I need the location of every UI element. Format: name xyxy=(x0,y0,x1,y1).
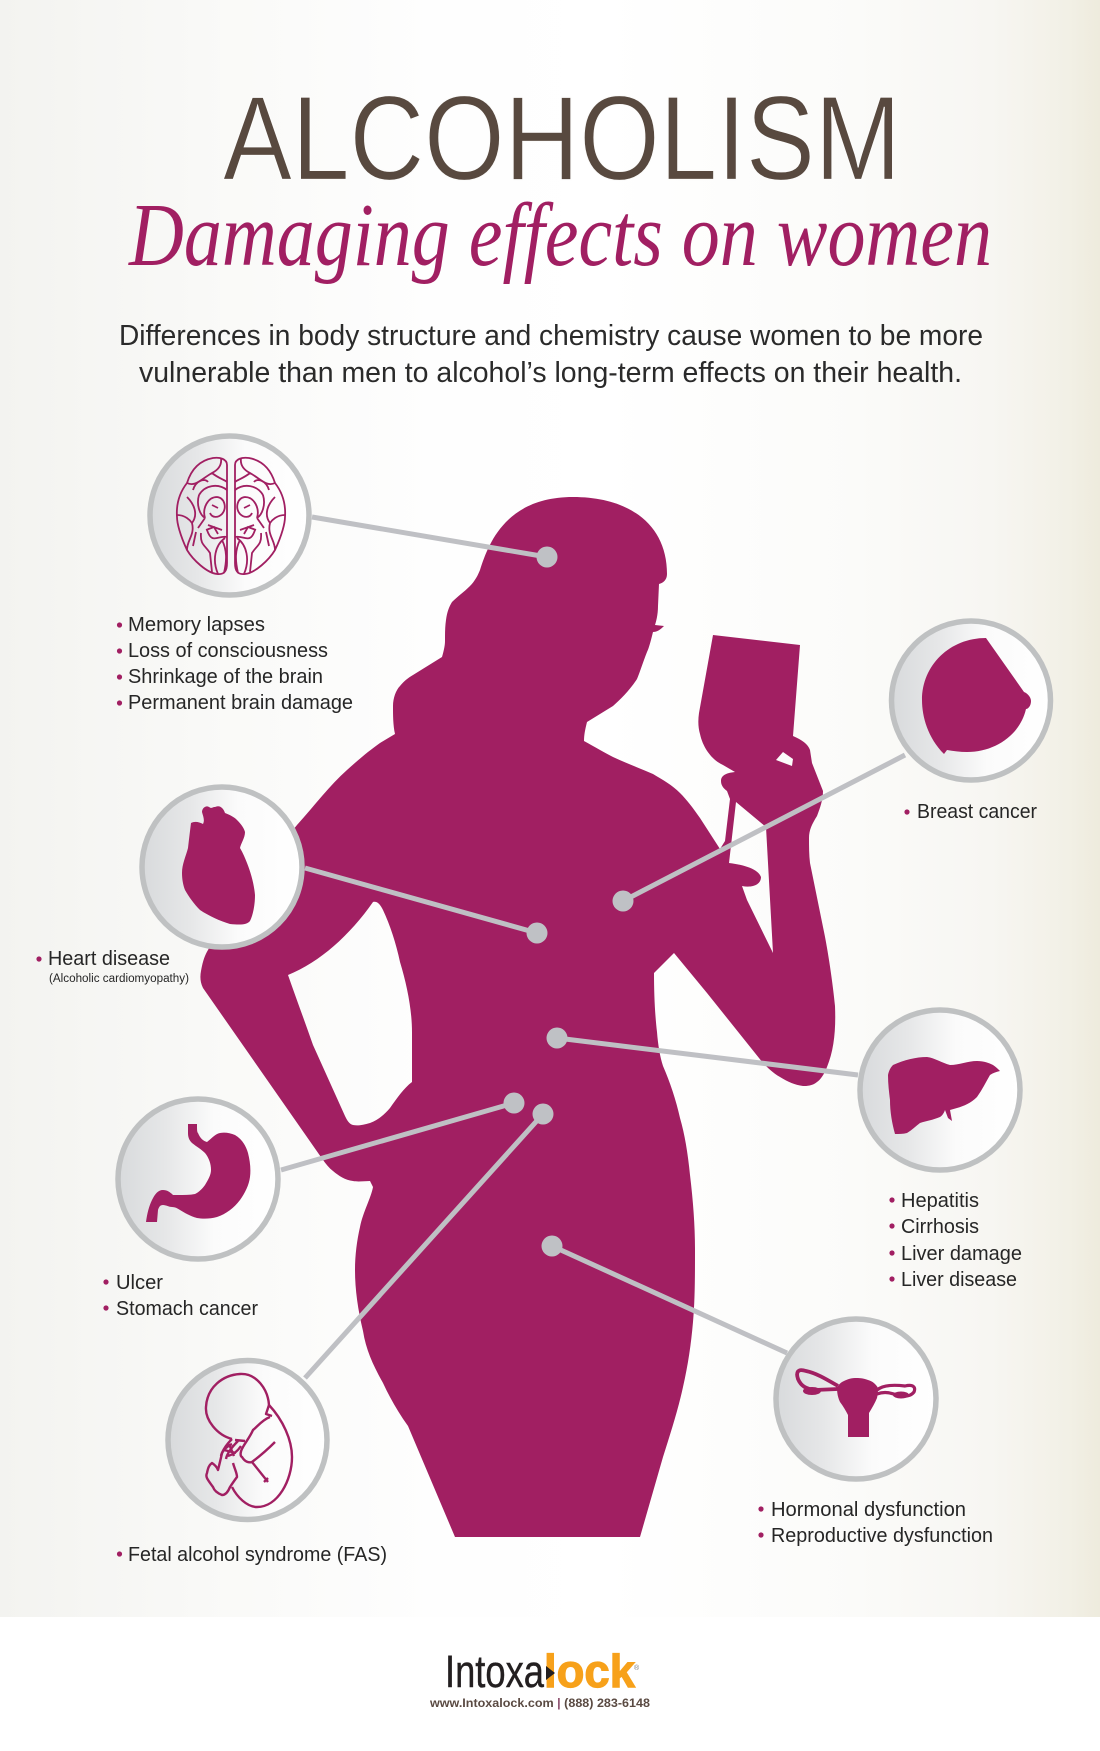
connector: fetus xyxy=(305,1104,554,1378)
icon: fetus xyxy=(206,1374,292,1507)
logo xyxy=(445,1645,640,1697)
icon: heart xyxy=(182,806,255,925)
intro text xyxy=(119,320,983,389)
icon: uterus and ovaries xyxy=(797,1370,915,1437)
panel: breast xyxy=(892,621,1050,780)
list: reproductive effects: Reproductive dysfunction xyxy=(771,1524,993,1547)
panel: heart xyxy=(142,787,302,947)
panel: reproductive organs xyxy=(776,1319,936,1479)
panel: fetus xyxy=(168,1360,327,1520)
connector: reproductive organs xyxy=(542,1236,787,1353)
list: reproductive effects: Hormonal dysfunction xyxy=(771,1498,966,1521)
list: brain effects xyxy=(117,613,353,714)
list: heart effects: Heart disease xyxy=(48,947,170,970)
list: brain effects: Loss of consciousness xyxy=(128,639,328,662)
list: brain effects: Permanent brain damage xyxy=(128,691,353,714)
panel: liver xyxy=(860,1010,1020,1170)
list: stomach effects: Ulcer xyxy=(116,1271,163,1294)
connector: brain xyxy=(312,517,558,568)
logo: lock xyxy=(544,1645,635,1697)
list: stomach effects: Stomach cancer xyxy=(116,1297,258,1320)
list: reproductive effects xyxy=(758,1498,993,1547)
list: breast effects: Breast cancer xyxy=(917,800,1037,823)
icon: liver xyxy=(888,1057,1000,1134)
logo: Intoxa xyxy=(445,1646,545,1697)
panel: brain xyxy=(150,436,309,595)
logo: ® xyxy=(634,1664,640,1672)
list: liver effects: Cirrhosis xyxy=(901,1215,979,1238)
list: liver effects: Liver damage xyxy=(901,1242,1022,1265)
connector: stomach xyxy=(281,1092,524,1170)
connector: liver xyxy=(546,1028,858,1075)
connector: heart xyxy=(305,868,548,944)
list: heart effects: (Alcoholic cardiomyopathy) xyxy=(49,973,189,985)
list: liver effects xyxy=(889,1189,1022,1291)
list: stomach effects xyxy=(103,1271,258,1320)
intro text: vulnerable than men to alcohol’s long-term effects on their health. xyxy=(139,357,962,389)
icon: brain xyxy=(177,458,285,574)
list: liver effects: Liver disease xyxy=(901,1268,1017,1291)
intro text: Differences in body structure and chemistry cause women to be more xyxy=(119,320,983,352)
panel: stomach xyxy=(118,1099,278,1259)
icon: breast xyxy=(922,638,1031,754)
silhouette of woman holding a wine glass xyxy=(200,497,835,1537)
connector: breast xyxy=(612,755,905,912)
list: heart effects xyxy=(36,947,189,985)
list: brain effects: Shrinkage of the brain xyxy=(128,665,323,688)
icon: stomach xyxy=(146,1124,250,1222)
list: liver effects: Hepatitis xyxy=(901,1189,979,1212)
list: fetal effects: Fetal alcohol syndrome (FAS) xyxy=(128,1543,387,1566)
title: ALCOHOLISM xyxy=(223,72,901,206)
list: brain effects: Memory lapses xyxy=(128,613,265,636)
footer xyxy=(0,1617,1100,1751)
contact line: www.Intoxalock.com | (888) 283-6148 xyxy=(429,1698,651,1710)
